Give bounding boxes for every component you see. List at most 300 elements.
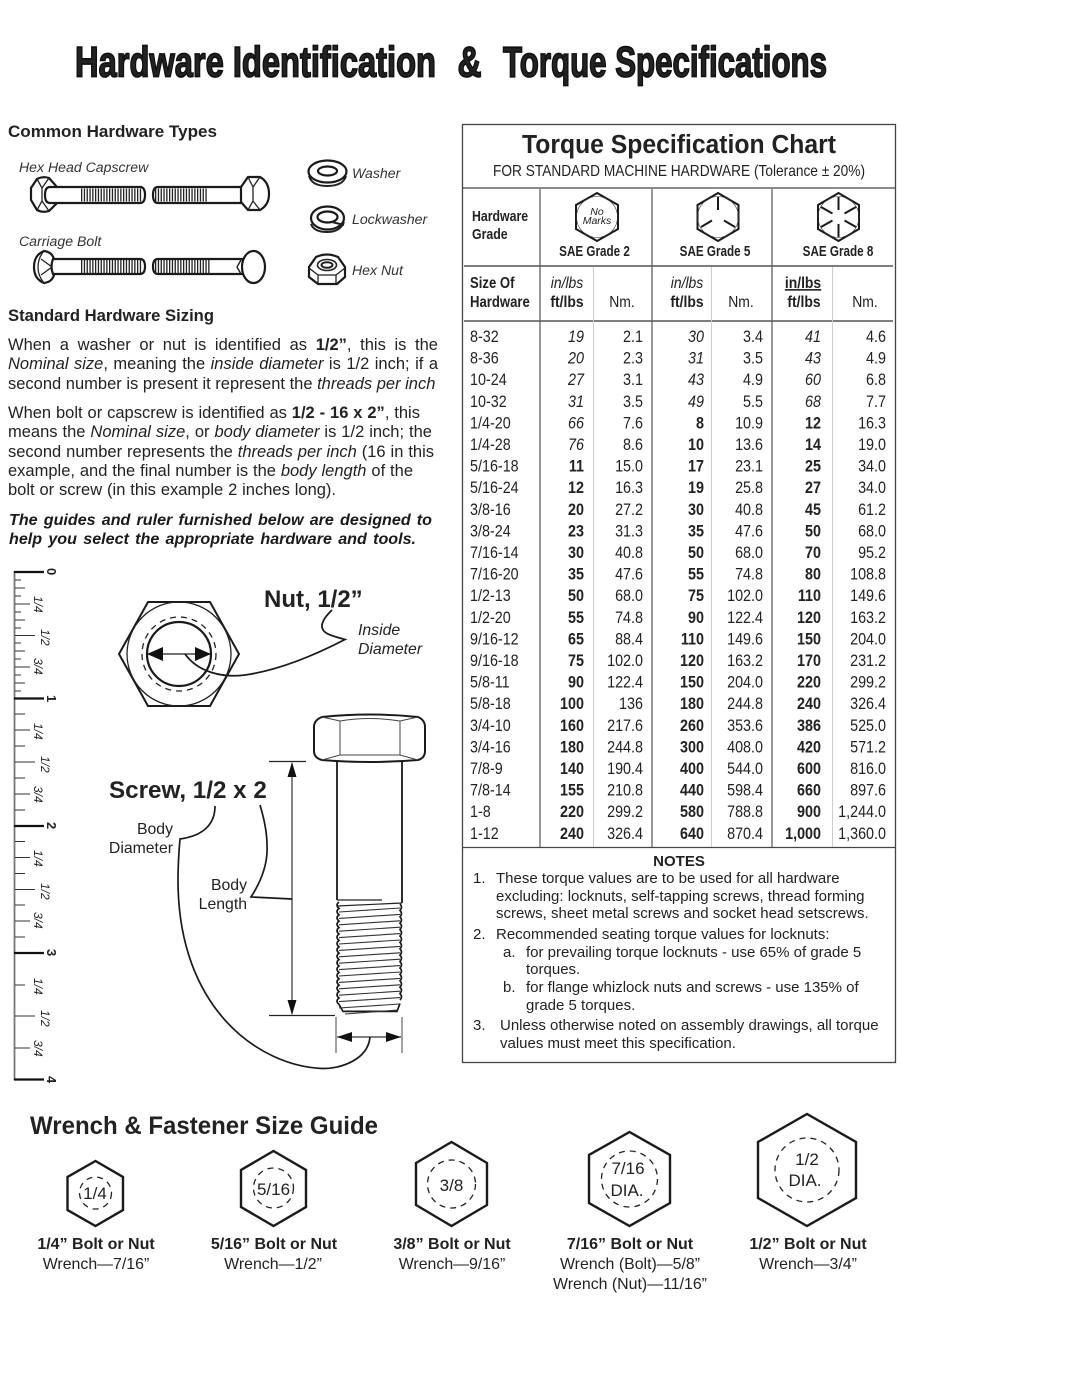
column: grade 8 newton metres: 34.0 [858,458,886,476]
column: grade 5 torque: 640 [680,825,704,843]
column headers: in/lbs [671,274,704,292]
notes: 2. [473,926,486,943]
column: grade 2 newton metres: 40.8 [615,544,643,562]
label: inside diameter [358,622,423,658]
ruler: 1/4 [31,850,45,867]
title [75,38,827,86]
size guide: 7/16: DIA. [610,1181,644,1200]
column: grade 2 newton metres [607,328,643,843]
size guide: 5/16: Wrench—1/2” [224,1256,322,1273]
column: grade 5 newton metres: 122.4 [727,609,763,627]
column: grade 8 newton metres: 149.6 [850,587,886,605]
column: grade 2 newton metres: 8.6 [623,436,643,454]
column: grade 5 torque: 10 [688,436,704,454]
column: grade 2 newton metres: 217.6 [607,717,643,735]
column: grade 2 torque: 220 [560,803,584,821]
ruler: 1/2 [38,1010,52,1027]
notes [473,853,879,1052]
column: grade 2 newton metres: 102.0 [607,652,643,670]
diagram: nut [119,602,345,706]
column: grade 5 torque: 8 [696,415,704,433]
column: grade 2 newton metres: 2.3 [623,350,643,368]
column: grade 2 torque: 155 [560,782,584,800]
column: grade 8 torque: 43 [805,350,821,368]
icon: lockwasher [311,206,344,232]
column: grade 2 newton metres: 68.0 [615,587,643,605]
label: size of hardware: Hardware [470,294,530,311]
column: grade 5 torque: 75 [688,587,704,605]
column: grade 5 newton metres: 3.5 [743,350,763,368]
column: grade 5 torque [680,328,704,843]
notes: values must meet this specification. [500,1035,736,1052]
column: grade 5 newton metres: 47.6 [735,523,763,541]
column: grade 2 newton metres: 3.5 [623,393,643,411]
column: grade 8 torque: 120 [797,609,821,627]
column: hardware sizes: 5/8-18 [470,695,511,713]
column: grade 8 torque: 150 [797,631,821,649]
column: grade 8 torque: 70 [805,544,821,562]
column: grade 5 newton metres: 598.4 [727,782,763,800]
column: grade 8 newton metres: 68.0 [858,523,886,541]
column: grade 8 newton metres: 108.8 [850,566,886,584]
column: grade 5 newton metres: 149.6 [727,631,763,649]
size guide: 7/16: 7/16” Bolt or Nut [567,1236,694,1253]
column: hardware sizes: 9/16-12 [470,631,519,649]
column: grade 5 torque: 300 [680,739,704,757]
column headers: in/lbs [551,274,584,292]
column: grade 5 torque: 55 [688,566,704,584]
text block: bolt sizing: bolt or screw (in this example 2 inches long). [8,481,336,499]
column: grade 8 torque: 386 [797,717,821,735]
column: grade 5 torque: 49 [688,393,704,411]
notes: screws, sheet metal screws and socket head setscrews. [496,905,869,922]
column: grade 8 torque: 14 [805,436,821,454]
ruler: 0 [44,568,59,575]
column headers: ft/lbs [787,293,821,311]
notes: grade 5 torques. [526,997,635,1014]
column: grade 2 torque: 76 [568,436,584,454]
column: hardware sizes: 5/16-18 [470,458,519,476]
size guide: 7/16 [553,1132,707,1293]
notes: NOTES [653,853,705,870]
label: grade names: SAE Grade 2 [559,243,630,259]
column: grade 5 torque: 120 [680,652,704,670]
label: nut size: Nut, 1/2” [264,586,363,613]
label: hardware grade: Hardware [472,208,529,224]
column headers: ft/lbs [550,293,584,311]
chart subheading: FOR STANDARD MACHINE HARDWARE (Tolerance ± 20%) [493,163,865,180]
column: hardware sizes: 1/2-13 [470,587,511,605]
column: grade 2 torque: 20 [568,501,584,519]
column: grade 8 newton metres: 4.6 [866,328,886,346]
column: grade 2 torque: 12 [568,479,584,497]
column: grade 8 torque: 900 [797,803,821,821]
column: hardware sizes: 10-24 [470,371,507,389]
label: grade names [559,243,873,259]
column: grade 8 newton metres: 61.2 [858,501,886,519]
column: grade 8 newton metres: 6.8 [866,371,886,389]
notes: These torque values are to be used for all hardware [496,870,840,887]
column: grade 5 torque: 50 [688,544,704,562]
column: grade 8 torque: 12 [805,415,821,433]
column: grade 2 torque: 65 [568,631,584,649]
ruler: 1/2 [38,883,52,900]
column: grade 8 newton metres: 204.0 [850,631,886,649]
column headers: Nm. [609,293,635,311]
ruler [14,568,59,1084]
panel: common hardware illustrations [19,159,429,284]
column: grade 2 newton metres: 326.4 [607,825,643,843]
column: hardware sizes: 7/8-14 [470,782,511,800]
column: grade 2 torque: 100 [560,695,584,713]
column: grade 2 newton metres: 2.1 [623,328,643,346]
ruler: 1 [44,695,59,702]
column: grade 5 torque: 260 [680,717,704,735]
column: hardware sizes: 5/16-24 [470,479,519,497]
column: grade 5 newton metres: 68.0 [735,544,763,562]
size guide: 7/16: Wrench (Bolt)—5/8” [560,1256,700,1273]
column: grade 2 torque: 31 [568,393,584,411]
column: grade 2 newton metres: 244.8 [607,739,643,757]
column: grade 5 newton metres: 408.0 [727,739,763,757]
column: grade 8 torque: 60 [805,371,821,389]
column: grade 5 newton metres: 788.8 [727,803,763,821]
column: grade 8 newton metres: 231.2 [850,652,886,670]
label: hardware grade: Grade [472,226,508,242]
ruler: 3/4 [31,658,45,675]
column: hardware sizes: 1-8 [470,803,491,821]
ruler: 1/4 [31,978,45,995]
column: grade 8 newton metres: 897.6 [850,782,886,800]
label: lockwasher: Lockwasher [352,211,429,227]
label: body diameter [109,821,173,857]
column: grade 2 newton metres: 210.8 [607,782,643,800]
column: grade 2 torque: 140 [560,760,584,778]
column: grade 5 newton metres: 23.1 [735,458,763,476]
size guide: 5/16: 5/16 [257,1180,290,1199]
icon: SAE grade 5 head [698,193,738,241]
label: screw size: Screw, 1/2 x 2 [109,777,267,804]
column: grade 2 torque: 180 [560,739,584,757]
column: hardware sizes: 1/4-20 [470,415,511,433]
column: grade 5 torque: 43 [688,371,704,389]
size guide: 3/8: 3/8 [440,1176,463,1195]
column: grade 5 newton metres: 13.6 [735,436,763,454]
column: grade 5 newton metres: 163.2 [727,652,763,670]
icon: SAE grade 2 head [576,193,618,241]
title: Hardware Identification [75,38,436,86]
column: hardware sizes: 1/4-28 [470,436,511,454]
ruler: 1/4 [31,596,45,613]
column: grade 2 newton metres: 136 [619,695,643,713]
column: grade 8 torque: 41 [805,328,821,346]
column: grade 2 newton metres: 47.6 [615,566,643,584]
column: grade 5 torque: 110 [681,631,704,649]
column: grade 2 torque: 23 [568,523,584,541]
column: grade 2 torque: 19 [568,328,584,346]
column: hardware sizes [470,328,519,843]
column: grade 5 newton metres: 10.9 [735,415,763,433]
column: grade 8 torque: 660 [797,782,821,800]
column: grade 5 newton metres: 3.4 [743,328,763,346]
notes: excluding: locknuts, self-tapping screws, thread forming [496,888,865,905]
column: hardware sizes: 8-32 [470,328,499,346]
column: hardware sizes: 10-32 [470,393,507,411]
column: hardware sizes: 5/8-11 [470,674,510,692]
ruler: 3/4 [31,1040,45,1057]
column: grade 8 newton metres: 95.2 [858,544,886,562]
text block: washer and nut sizing: Nominal size, meaning the inside diameter is 1/2 inch; if a [8,355,438,373]
icon: carriage bolt, right segment [153,251,265,283]
column: grade 8 torque: 1,000 [785,825,821,843]
label: size of hardware: Size Of [470,275,515,292]
label: body diameter: Body [137,821,173,838]
column: hardware sizes: 9/16-18 [470,652,519,670]
column: grade 8 newton metres: 299.2 [850,674,886,692]
text block: bolt sizing: When bolt or capscrew is identified as 1/2 - 16 x 2”, this [8,404,420,422]
column: grade 8 torque [785,328,821,843]
label: body length [199,877,247,913]
ruler: 3 [44,949,59,956]
column: hardware sizes: 3/4-10 [470,717,511,735]
label: body diameter: Diameter [109,840,173,857]
column: grade 8 torque: 68 [805,393,821,411]
column: hardware sizes: 1-12 [470,825,499,843]
column: grade 2 newton metres: 122.4 [607,674,643,692]
label: inside diameter: Inside [358,622,400,639]
column: grade 5 newton metres: 204.0 [727,674,763,692]
label: carriage bolt: Carriage Bolt [19,233,102,249]
column: grade 8 newton metres [838,328,886,843]
column: grade 8 torque: 220 [797,674,821,692]
column headers: Nm. [852,293,878,311]
column: grade 2 torque [560,328,585,843]
notes: 1. [473,870,486,887]
ruler: 3/4 [31,786,45,803]
column: grade 8 newton metres: 1,244.0 [838,803,886,821]
icon: washer [308,160,346,186]
column: grade 8 newton metres: 525.0 [850,717,886,735]
column: grade 2 torque: 27 [567,371,585,389]
size guide: 1/4: 1/4” Bolt or Nut [37,1236,155,1253]
column: grade 8 newton metres: 34.0 [858,479,886,497]
column: grade 2 newton metres: 74.8 [615,609,643,627]
label: inside diameter: Diameter [358,641,423,658]
column: grade 8 newton metres: 816.0 [850,760,886,778]
size guide: 1/2: DIA. [788,1171,822,1190]
ruler: 1/4 [31,723,45,740]
column: hardware sizes: 7/16-14 [470,544,519,562]
text block: washer and nut sizing [8,336,438,393]
column: hardware sizes: 7/8-9 [470,760,503,778]
diagram: screw [178,714,425,1069]
column: grade 2 torque: 35 [568,566,584,584]
column headers: Nm. [728,293,754,311]
column: grade 5 newton metres [727,328,763,843]
heading: wrench and fastener size guide: Wrench & Fastener Size Guide [30,1112,378,1140]
column: grade 5 torque: 30 [688,501,704,519]
column: grade 8 torque: 170 [797,652,821,670]
column: grade 5 newton metres: 25.8 [735,479,763,497]
text block: guide note [9,511,432,548]
notes: Unless otherwise noted on assembly drawings, all torque [500,1017,879,1034]
column: grade 2 newton metres: 7.6 [623,415,643,433]
text block: bolt sizing: example, and the final number is the body length of the [8,462,413,480]
column: grade 8 torque: 600 [797,760,821,778]
column: grade 2 newton metres: 31.3 [615,523,643,541]
column: hardware sizes: 1/2-20 [470,609,511,627]
column: grade 5 torque: 400 [680,760,704,778]
label: hardware grade [472,208,529,242]
column: grade 5 torque: 150 [680,674,704,692]
column: grade 8 newton metres: 16.3 [858,415,886,433]
text block: guide note: The guides and ruler furnished below are designed to [9,511,432,529]
notes: b. [503,979,516,996]
column headers: ft/lbs [670,293,704,311]
column: grade 5 torque: 440 [680,782,704,800]
notes: for prevailing torque locknuts - use 65% of grade 5 [526,944,861,961]
column: grade 5 torque: 19 [688,479,704,497]
label: washer: Washer [352,165,402,181]
column: grade 2 newton metres: 27.2 [615,501,643,519]
text block: bolt sizing: second number represents the threads per inch (16 in this [8,443,434,461]
text block: bolt sizing [8,404,434,499]
size guide: 1/2: 1/2 [795,1150,819,1169]
ruler: 1/2 [38,756,52,773]
label: hex head capscrew: Hex Head Capscrew [19,159,149,175]
column: grade 8 torque: 80 [805,566,821,584]
column: grade 8 torque: 25 [805,458,821,476]
column: grade 5 newton metres: 102.0 [727,587,763,605]
icon: SAE grade 8 head [818,193,859,241]
column: grade 8 newton metres: 1,360.0 [838,825,886,843]
heading: common hardware types: Common Hardware Types [8,123,217,141]
ruler: 4 [44,1076,59,1084]
label: body length: Body [211,877,247,894]
column: grade 5 torque: 580 [680,803,704,821]
icon: SAE grade 2 head: Marks [583,215,612,227]
column: grade 8 newton metres: 326.4 [850,695,886,713]
column headers [550,274,878,311]
column: grade 2 newton metres: 190.4 [607,760,643,778]
column: grade 8 newton metres: 4.9 [866,350,886,368]
notes: a. [503,944,516,961]
size guide: 3/8: Wrench—9/16” [399,1256,505,1273]
ruler: 1/2 [38,629,52,646]
column: grade 8 torque: 420 [797,739,821,757]
column: grade 2 torque: 90 [568,674,584,692]
column: grade 8 torque: 50 [805,523,821,541]
ruler: 3/4 [31,912,45,929]
column: grade 5 torque: 31 [688,350,704,368]
icon: hex nut [309,254,345,284]
label: size of hardware [470,275,530,311]
text block: washer and nut sizing: When a washer or nut is identified as 1/2”, this is the [8,336,438,354]
column: grade 5 newton metres: 4.9 [743,371,763,389]
column: hardware sizes: 7/16-20 [470,566,519,584]
title: Torque Specifications [503,38,827,86]
column: grade 5 newton metres: 74.8 [735,566,763,584]
icon: carriage bolt, left segment [34,251,145,283]
column: grade 8 torque: 45 [805,501,821,519]
ruler: 2 [44,822,59,829]
column: grade 2 torque: 50 [568,587,584,605]
column: grade 5 torque: 17 [688,458,704,476]
column: grade 2 newton metres: 15.0 [615,458,643,476]
column: grade 2 torque: 55 [568,609,584,627]
column: grade 2 torque: 240 [560,825,584,843]
size guide: 5/16: 5/16” Bolt or Nut [211,1236,338,1253]
column: hardware sizes: 8-36 [470,350,499,368]
size guide: 3/8 [393,1142,511,1273]
size guide: 1/4: 1/4 [83,1184,107,1203]
column: grade 8 newton metres: 19.0 [858,436,886,454]
column: grade 8 newton metres: 571.2 [850,739,886,757]
size guide: 7/16: Wrench (Nut)—11/16” [553,1276,707,1293]
chart heading: Torque Specification Chart [522,131,836,159]
column: grade 2 torque: 160 [560,717,584,735]
column: grade 5 torque: 90 [688,609,704,627]
size guide: 7/16: 7/16 [611,1159,645,1178]
size guide: 1/2: Wrench—3/4” [759,1256,857,1273]
notes: 3. [473,1017,486,1034]
icon: SAE grade 2 head: No [590,206,604,218]
column: grade 8 torque: 27 [805,479,821,497]
label: grade names: SAE Grade 5 [680,243,750,259]
column: grade 5 torque: 180 [680,695,704,713]
column: grade 2 torque: 66 [568,415,584,433]
icon: hex head capscrew, left segment [31,177,145,212]
column: grade 2 newton metres: 3.1 [623,371,643,389]
size guide: 1/4: Wrench—7/16” [43,1256,149,1273]
column: grade 2 newton metres: 299.2 [607,803,643,821]
notes: torques. [526,961,580,978]
column: grade 2 torque: 30 [568,544,584,562]
column: hardware sizes: 3/8-24 [470,523,511,541]
size guide: 1/4 [37,1161,155,1273]
column: grade 5 newton metres: 544.0 [727,760,763,778]
column: grade 5 newton metres: 353.6 [727,717,763,735]
column: grade 2 newton metres: 16.3 [615,479,643,497]
size guide: 1/2 [749,1114,867,1273]
column: grade 5 torque: 35 [688,523,704,541]
column: grade 8 torque: 240 [797,695,821,713]
column: grade 8 newton metres: 7.7 [866,393,886,411]
icon: hex head capscrew, right segment [153,177,269,210]
heading: standard hardware sizing: Standard Hardware Sizing [8,307,214,325]
column headers: in/lbs [785,274,821,292]
size guide: 5/16 [211,1151,338,1273]
column: grade 2 torque: 11 [569,458,584,476]
column: grade 5 newton metres: 5.5 [743,393,763,411]
size guide: 3/8: 3/8” Bolt or Nut [393,1236,511,1253]
column: grade 5 newton metres: 40.8 [735,501,763,519]
column: hardware sizes: 3/8-16 [470,501,511,519]
column: grade 5 newton metres: 870.4 [727,825,763,843]
text block: guide note: help you select the appropriate hardware and tools. [9,530,416,548]
label: hex nut: Hex Nut [352,262,404,278]
panel: torque specification chart [462,124,896,1062]
column: grade 2 torque: 75 [568,652,584,670]
text block: bolt sizing: means the Nominal size, or body diameter is 1/2 inch; the [8,423,432,441]
column: grade 5 torque: 30 [688,328,704,346]
size guide: 1/2: 1/2” Bolt or Nut [749,1236,867,1253]
column: grade 5 newton metres: 244.8 [727,695,763,713]
column: grade 8 torque: 110 [798,587,821,605]
notes: for flange whizlock nuts and screws - use 135% of [526,979,859,996]
notes: Recommended seating torque values for locknuts: [496,926,830,943]
column: hardware sizes: 3/4-16 [470,739,511,757]
